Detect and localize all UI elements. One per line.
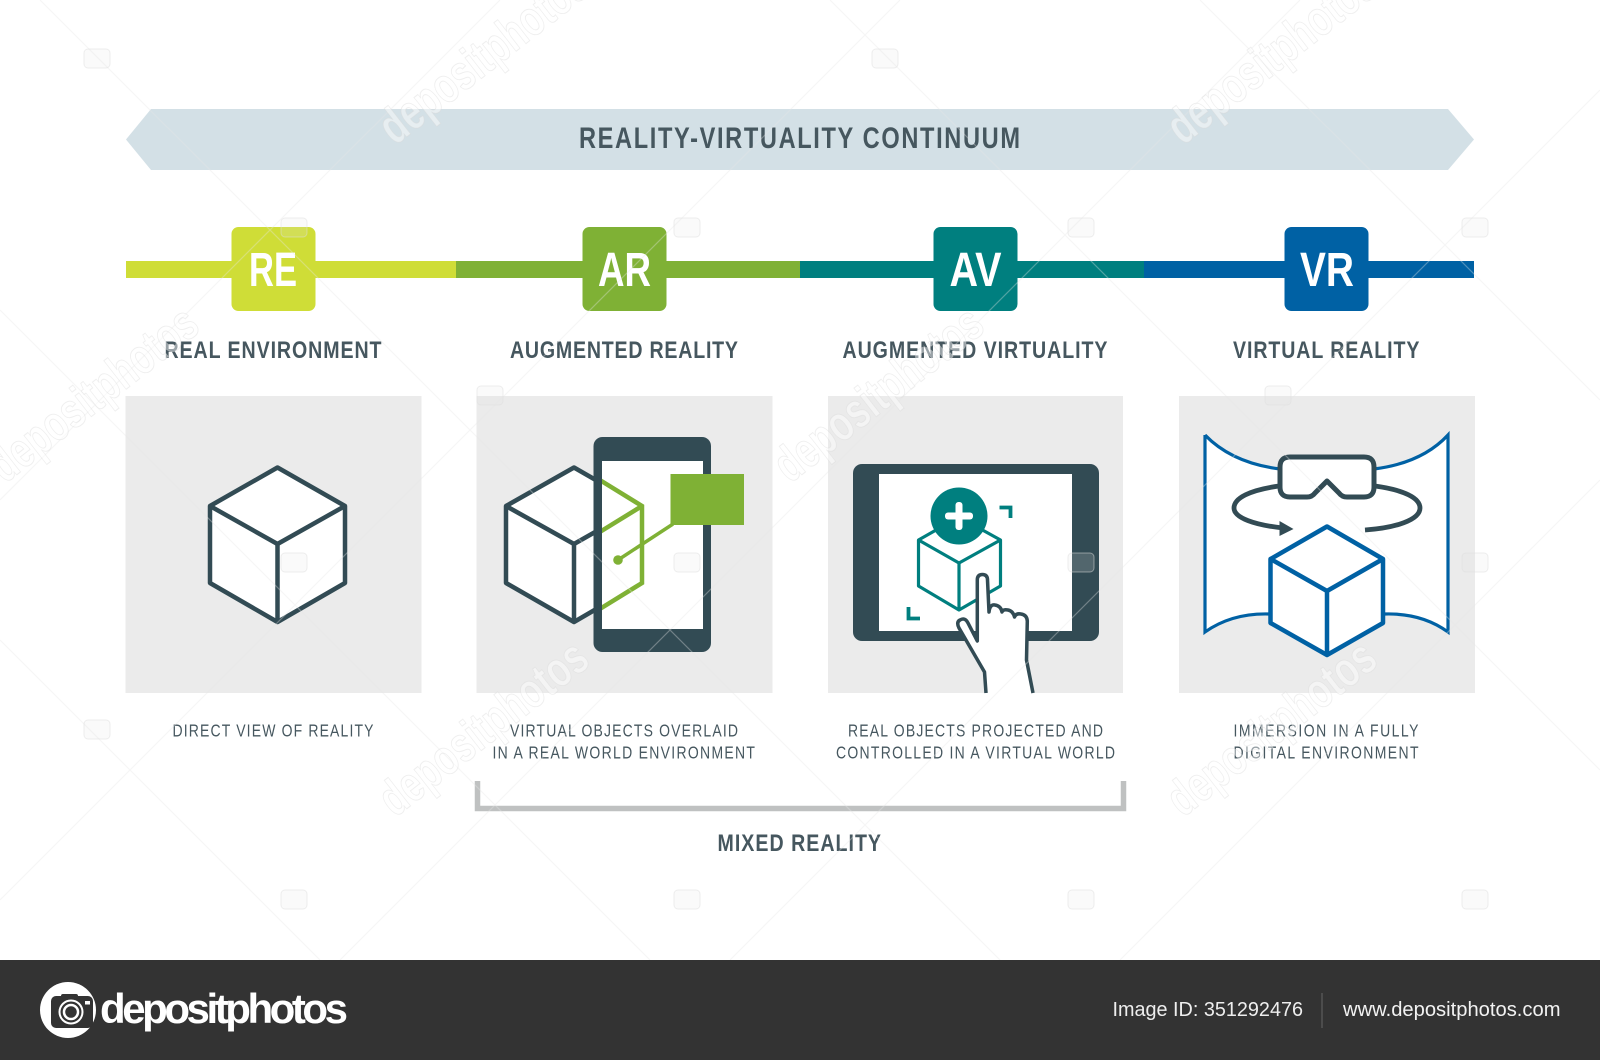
panel: virtual reality <box>1179 396 1475 693</box>
icon: VR goggles <box>1280 457 1374 497</box>
icon: corner markers <box>908 508 1010 618</box>
continuum line <box>126 261 1474 278</box>
panel: augmented virtuality <box>828 396 1123 693</box>
mixed reality bracket <box>478 781 1124 808</box>
footer bar <box>0 960 1600 1060</box>
heading: augmented reality: AUGMENTED REALITY <box>510 336 738 364</box>
watermark overlay: depositphotos <box>1155 629 1387 827</box>
caption: virtual reality <box>1234 722 1419 763</box>
heading: virtual reality: VIRTUAL REALITY <box>1233 336 1420 364</box>
badge: AR <box>582 227 666 311</box>
caption: augmented virtuality <box>836 722 1115 763</box>
badge: VR <box>1284 227 1368 311</box>
panel: augmented reality <box>476 396 772 693</box>
caption: augmented virtuality: REAL OBJECTS PROJECTED AND <box>848 722 1103 741</box>
caption: augmented reality: VIRTUAL OBJECTS OVERLAID <box>510 722 738 741</box>
icon: depositphotos camera logo <box>40 982 96 1038</box>
icon: smartphone <box>594 437 711 652</box>
icon: augmented cube part <box>602 478 644 610</box>
caption: virtual reality: IMMERSION IN A FULLY <box>1234 722 1419 741</box>
heading: real environment: REAL ENVIRONMENT <box>164 336 382 364</box>
heading: mixed reality: MIXED REALITY <box>718 829 881 857</box>
badge: AV <box>934 227 1018 311</box>
icon: curved screen <box>1205 435 1448 632</box>
badge: AV: AV <box>950 244 1002 297</box>
badge: RE <box>232 227 316 311</box>
icon: plus button <box>930 488 988 544</box>
image id: Image ID: 351292476 <box>1112 999 1303 1021</box>
caption: real environment: DIRECT VIEW OF REALITY <box>172 722 374 741</box>
icon: tablet <box>853 464 1099 641</box>
icon: info tag <box>613 474 744 565</box>
caption: virtual reality: DIGITAL ENVIRONMENT <box>1234 744 1419 763</box>
icon: teal cube <box>918 517 1000 610</box>
separator <box>1322 993 1323 1028</box>
panel: real environment <box>126 396 422 693</box>
title banner <box>126 109 1474 170</box>
badge: RE: RE <box>249 244 297 297</box>
watermark overlay: depositphotos <box>762 295 994 493</box>
heading: augmented virtuality: AUGMENTED VIRTUALITY <box>842 336 1108 364</box>
caption: augmented reality: IN A REAL WORLD ENVIRONMENT <box>492 744 755 763</box>
badge: AR: AR <box>598 244 651 297</box>
icon: blue cube <box>1270 526 1383 655</box>
icon: pointing hand <box>958 574 1033 693</box>
icon: rotation arrow <box>1234 486 1420 536</box>
icon: real cube <box>506 468 641 622</box>
logo wordmark: depositphotos <box>100 985 348 1032</box>
website url: www.depositphotos.com <box>1342 999 1560 1021</box>
caption: augmented reality <box>492 722 755 763</box>
title banner: REALITY-VIRTUALITY CONTINUUM <box>579 121 1020 155</box>
badge: VR: VR <box>1300 244 1354 297</box>
icon: cube <box>210 468 345 622</box>
watermark overlay: depositphotos <box>367 629 599 827</box>
caption: augmented virtuality: CONTROLLED IN A VIRTUAL WORLD <box>836 744 1115 763</box>
